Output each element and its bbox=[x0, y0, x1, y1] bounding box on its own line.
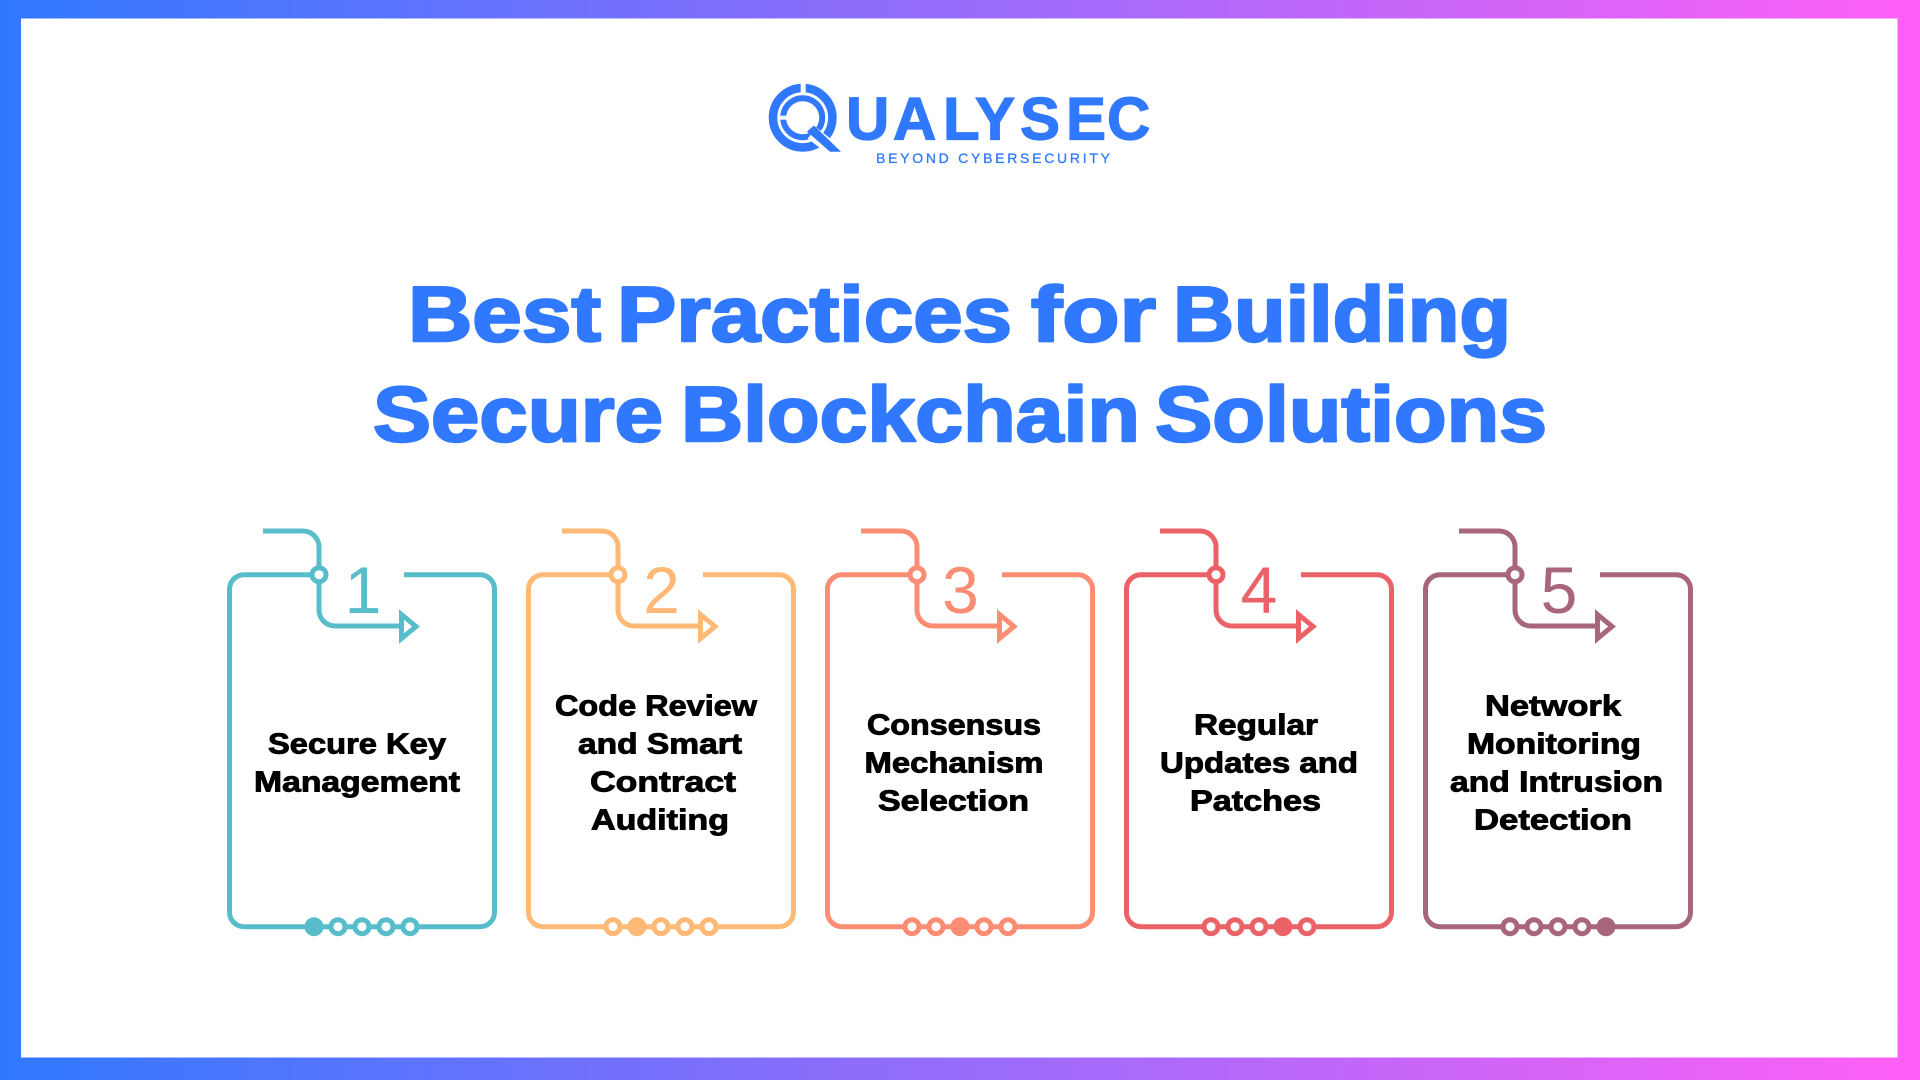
card text: Management bbox=[254, 766, 460, 798]
arrow head bbox=[700, 614, 715, 638]
title: Solutions bbox=[1155, 370, 1547, 458]
panel: card 5 Network Monitoring and Intrusion Detection bbox=[1426, 531, 1690, 934]
card outline bbox=[1126, 575, 1392, 927]
card text: Selection bbox=[878, 786, 1029, 818]
number 2: 2 bbox=[643, 553, 680, 627]
progress dots bbox=[307, 920, 417, 934]
arrow head bbox=[1000, 614, 1014, 638]
icon: Q magnifier mark bbox=[773, 82, 841, 152]
junction circle bbox=[611, 568, 625, 582]
junction circle bbox=[910, 568, 924, 582]
panel: card 4 Regular Updates and Patches bbox=[1126, 531, 1392, 934]
junction circle bbox=[1508, 568, 1522, 582]
progress dots bbox=[1503, 920, 1613, 934]
card text: and Intrusion bbox=[1450, 766, 1663, 798]
card outline bbox=[229, 575, 494, 927]
title: Blockchain bbox=[681, 370, 1140, 458]
card text: Secure Key bbox=[268, 728, 446, 760]
card outline bbox=[528, 575, 794, 927]
number 5: 5 bbox=[1541, 553, 1577, 627]
title: Secure bbox=[373, 370, 663, 458]
progress dots bbox=[606, 920, 716, 934]
number 1: 1 bbox=[345, 553, 381, 627]
card text: Patches bbox=[1190, 786, 1321, 818]
card text bbox=[1450, 690, 1663, 836]
arrow connector bbox=[562, 531, 700, 626]
card text: Monitoring bbox=[1467, 728, 1641, 760]
arrow head bbox=[1298, 614, 1313, 638]
card text: and Smart bbox=[578, 728, 742, 760]
card text: Consensus bbox=[867, 710, 1041, 742]
card outline bbox=[1426, 575, 1690, 927]
arrow connector bbox=[1459, 531, 1597, 626]
logo tagline: BEYOND CYBERSECURITY bbox=[876, 150, 1111, 166]
logo wordmark: UALYSEC bbox=[846, 85, 1150, 152]
junction circle bbox=[312, 568, 326, 582]
card text: Updates and bbox=[1160, 748, 1358, 780]
card text: Auditing bbox=[591, 804, 729, 836]
title bbox=[373, 270, 1547, 458]
card text bbox=[254, 728, 460, 798]
card text bbox=[555, 690, 757, 836]
title: Practices bbox=[617, 270, 1012, 358]
card text: Contract bbox=[590, 766, 736, 798]
arrow connector bbox=[861, 531, 999, 626]
card text bbox=[1160, 710, 1358, 818]
progress dots bbox=[1204, 920, 1314, 934]
panel: card 2 Code Review and Smart Contract Auditing bbox=[528, 531, 794, 934]
card text bbox=[864, 710, 1044, 818]
title: Building bbox=[1173, 270, 1511, 358]
junction circle bbox=[1209, 568, 1223, 582]
logo: Qualysec bbox=[773, 82, 1150, 166]
panel: card 1 Secure Key Management bbox=[229, 531, 494, 934]
card text: Mechanism bbox=[864, 748, 1044, 780]
title: for bbox=[1031, 270, 1156, 358]
number 4: 4 bbox=[1241, 553, 1277, 627]
title: Best bbox=[408, 270, 601, 358]
card text: Code Review bbox=[555, 690, 757, 722]
arrow head bbox=[1598, 614, 1612, 638]
arrow connector bbox=[263, 531, 401, 626]
panel: card 3 Consensus Mechanism Selection bbox=[828, 531, 1092, 934]
progress dots bbox=[905, 920, 1015, 934]
arrow connector bbox=[1160, 531, 1298, 626]
card text: Network bbox=[1485, 690, 1622, 722]
card text: Detection bbox=[1474, 804, 1632, 836]
number 3: 3 bbox=[942, 553, 979, 627]
card text: Regular bbox=[1194, 710, 1318, 742]
arrow head bbox=[402, 614, 416, 638]
card outline bbox=[828, 575, 1092, 927]
